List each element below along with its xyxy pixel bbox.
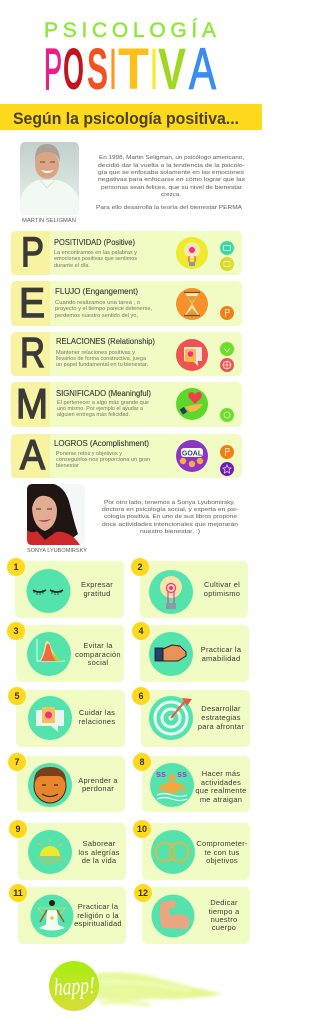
panel: A logros [11, 431, 242, 478]
card 8: Hacer más [202, 769, 240, 778]
card 2: optimismo [204, 589, 240, 598]
card 9: de la vida [82, 856, 117, 865]
card 12 [134, 884, 250, 944]
heading band [0, 104, 262, 130]
card 2: Cultivar el [204, 580, 240, 589]
icon: chat hearts [176, 339, 208, 371]
logo: brush stroke [92, 972, 222, 1005]
icon: goal [176, 440, 208, 472]
panel: M significado: SIGNIFICADO (Meaningful) [56, 389, 151, 398]
card 12: nuestro [211, 915, 237, 924]
panel: E flujo: Cuando realizamos una tarea , o [55, 300, 140, 306]
title: Positiva: I [151, 37, 157, 102]
card 4: 4 [138, 626, 144, 636]
card 11: 11 [13, 888, 23, 898]
card 3: 3 [13, 626, 19, 636]
card 12: tiempo a [209, 907, 240, 916]
card 6 [132, 687, 250, 747]
card 3: social [88, 658, 108, 667]
card 4: amabilidad [202, 654, 240, 663]
icon: leaf [220, 342, 234, 356]
title: Positiva: S [87, 37, 108, 102]
text block: Sonya intro: cología positiva. En uno de sus libros propone [104, 514, 237, 520]
card 8: me atraigan [200, 795, 242, 804]
card 4: Practicar la [201, 645, 242, 654]
title: Positiva: A [189, 37, 216, 102]
card 1 [7, 558, 124, 618]
card 9: los alegrías [78, 848, 120, 857]
text block: Seligman intro: decidió dar la vuelta a la tendencia de la psicolo- [98, 163, 245, 169]
card 10: 10 [137, 824, 147, 834]
panel: M significado [11, 380, 242, 427]
card 10: te con tus [204, 848, 240, 857]
logo: happy circle [49, 961, 99, 1011]
photo: Martin Seligman [20, 142, 79, 215]
panel: E flujo: E [19, 279, 45, 326]
card 10 [133, 820, 250, 880]
text block: Sonya intro: nuestro bienestar. :) [140, 529, 200, 535]
card 8: ss [177, 769, 187, 779]
title: Psicología: PSICOLOGÍA [44, 19, 216, 42]
card 7: Aprender a [78, 776, 118, 785]
panel: A logros: Ponerse retos y objetivos y [56, 451, 122, 457]
panel: E flujo: FLUJO (Engangement) [55, 287, 138, 296]
card 9: Saborear [83, 839, 116, 848]
title: Positiva: O [63, 37, 84, 102]
panel: P positividad: POSITIVIDAD (Positive) [54, 238, 135, 247]
card 11: religión o la [77, 911, 119, 920]
panel: E flujo [11, 279, 242, 326]
caption: Martin Seligman: MARTIN SELIGMAN [22, 218, 76, 224]
card 9: 9 [15, 824, 21, 834]
text block: Sonya intro: Por otro lado, tenemos a Sonya Lyubomirsky, [104, 500, 236, 506]
panel: R relaciones: llevarlos de forma constructiva, juega [56, 356, 147, 362]
card 8: 8 [139, 757, 145, 767]
panel: P positividad: La encontramos en las palabras y [54, 250, 137, 256]
text block: Seligman intro: negativas para enfocarse en cómo lograr que las [98, 177, 245, 183]
card 11 [9, 884, 126, 944]
text block: Sonya intro [102, 500, 238, 535]
card 3: Evitar la [83, 641, 113, 650]
icon: camera [220, 241, 234, 255]
card 8: ss [156, 769, 166, 779]
panel: P positividad: durante el día. [54, 263, 90, 269]
card 6: estrategias [201, 713, 241, 722]
card 11: Practicar la [78, 902, 119, 911]
icon: small leaf [220, 408, 234, 422]
title: Positiva: T [118, 37, 149, 102]
card 3: comparación [75, 650, 121, 659]
icon: star [220, 462, 234, 476]
card 5: relaciones [79, 717, 115, 726]
card 5: Cuidar las [79, 708, 115, 717]
text block: Seligman intro: Para ello desarrolla la teoría del bienestar PERMA [96, 205, 242, 211]
card 6: Desarrollar [201, 704, 241, 713]
panel: A logros: conseguirlos nos proporciona un gran [56, 457, 150, 463]
card 12: 12 [138, 888, 148, 898]
card 7 [8, 753, 125, 812]
text block: Seligman intro: gía que se enfocaba solamente en las emociones [98, 170, 244, 176]
card 5: 5 [14, 691, 20, 701]
title: Positiva: P [44, 37, 62, 102]
text block: Seligman intro: personas sean felices, que su nivel de bienestar [101, 185, 242, 191]
icon: calendar [220, 257, 234, 271]
panel: A logros: bienestar [56, 463, 79, 469]
panel: P positividad: P [21, 228, 44, 275]
logo: happy circle: happ! [53, 973, 95, 1001]
card 6: 6 [138, 691, 144, 701]
panel: M significado: El pertenecer a algo más grande que [57, 400, 149, 406]
panel: M significado: M [16, 380, 48, 427]
caption: Sonya Lyubomirsky: SONYA LYUBOMIRSKY [27, 548, 87, 554]
panel: R relaciones: RELACIONES (Relationship) [56, 337, 155, 346]
card 8 [133, 753, 250, 812]
icon: light bulb [176, 237, 208, 269]
panel: A logros: A [20, 431, 45, 478]
panel: A logros: LOGROS (Acomplishment) [54, 439, 149, 448]
card 11: espiritualidad [74, 919, 122, 928]
photo: Sonya Lyubomirsky [27, 484, 85, 545]
card 12: cuerpo [212, 923, 236, 932]
panel: M significado: uno mismo. Por ejemplo el ayudar a [57, 406, 144, 412]
text block: Seligman intro: crezca. [161, 192, 181, 198]
text block: Sonya intro: doce actividades intencionales que mejorarán [102, 522, 238, 528]
card 1: Expresar [81, 580, 113, 589]
icon: small flag [220, 445, 234, 459]
panel: M significado: alguien entrega más felicidad. [57, 412, 130, 418]
panel: R relaciones [11, 329, 242, 376]
card 2 [131, 558, 248, 618]
title: Positiva: I [110, 37, 116, 102]
card 8: actividades [201, 778, 241, 787]
card 1: gratitud [83, 589, 111, 598]
title: Positiva [44, 37, 216, 102]
panel: R relaciones: un papel fundamental en tu bienestar. [56, 362, 148, 368]
icon: goal: GOAL [182, 450, 203, 458]
card 12: Dedicar [210, 898, 238, 907]
card 1: 1 [13, 562, 19, 572]
text block: Seligman intro: En 1998, Martin Seligman, un psicólogo americano, [99, 155, 245, 161]
panel: P positividad [11, 228, 242, 275]
title: Positiva: V [158, 37, 186, 102]
card 9 [9, 820, 126, 880]
panel: E flujo: proyecto y el tiempo parece detenerse, [55, 306, 152, 312]
panel: P positividad: emociones positivas que sentimos [54, 256, 137, 262]
panel: R relaciones: Mantener relaciones positivas y [56, 350, 135, 356]
card 6: para afrontar [198, 722, 244, 731]
icon: hourglass [176, 288, 208, 320]
card 5 [8, 687, 125, 747]
panel: R relaciones: R [20, 329, 45, 376]
icon: globe [220, 358, 234, 372]
icon: flag [220, 306, 234, 320]
heading band: Según la psicología positiva... [13, 109, 239, 128]
card 7: 7 [14, 757, 20, 767]
panel: E flujo: perdemos nuestro sentido del yo, [55, 313, 138, 319]
text block: Sonya intro: doctora en psicología social, y experta en psi- [102, 507, 238, 513]
card 10: objetivos [206, 856, 238, 865]
icon: hand with heart [176, 388, 208, 420]
card 3 [7, 622, 124, 682]
card 4 [132, 622, 249, 682]
text block: Seligman intro [96, 155, 245, 211]
card 7: perdonar [82, 784, 114, 793]
card 8: que realmente [195, 786, 247, 795]
card 2: 2 [137, 562, 143, 572]
card 10: Comprometer- [196, 839, 248, 848]
